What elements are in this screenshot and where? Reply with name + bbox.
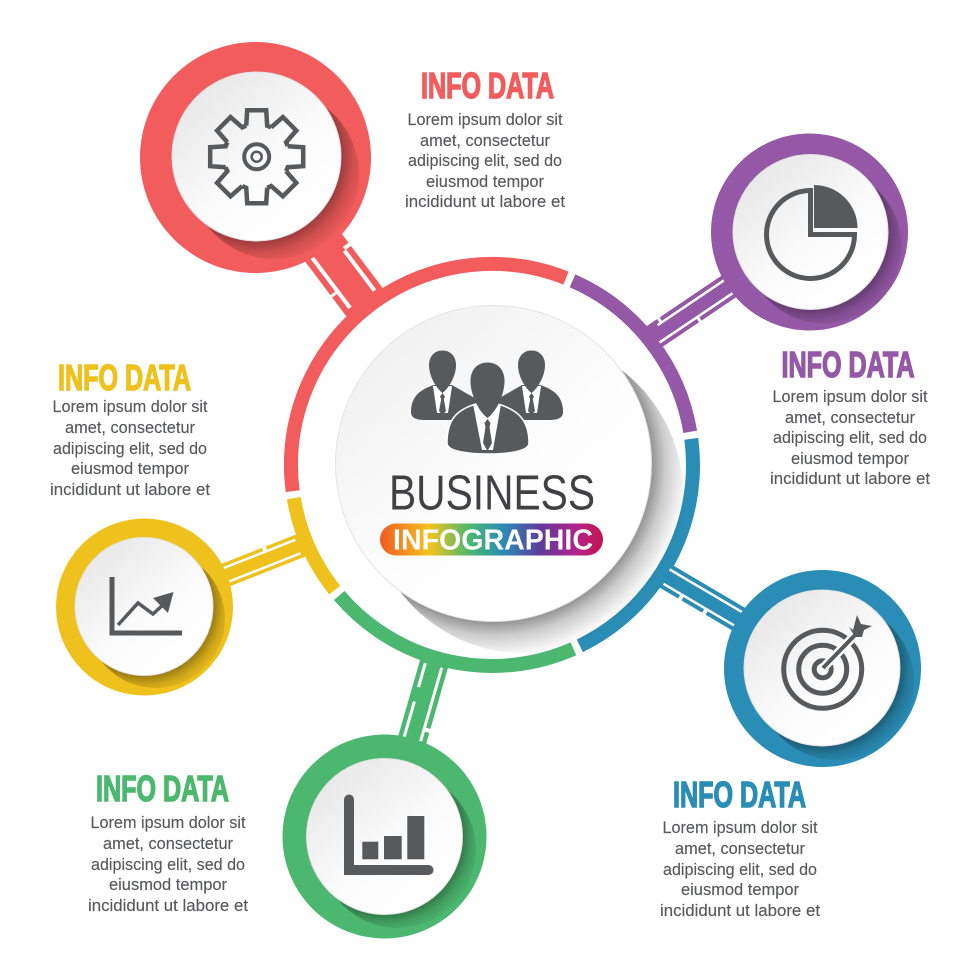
text block: blue: adipiscing elit, sed do (663, 861, 817, 879)
text block: red: INFO DATA (421, 65, 554, 106)
left person (411, 350, 478, 420)
text block: blue (660, 774, 820, 920)
node: red gear (140, 42, 371, 273)
text block: purple: eiusmod tempor (791, 450, 909, 468)
text block: purple (770, 344, 930, 488)
text block: green: Lorem ipsum dolor sit (90, 814, 246, 832)
ring segment: red (291, 264, 566, 491)
text block: purple: INFO DATA (782, 344, 914, 385)
text block: yellow: adipiscing elit, sed do (53, 440, 207, 458)
text block: yellow: incididunt ut labore et (50, 481, 210, 499)
text block: yellow: eiusmod tempor (71, 460, 189, 478)
text block: green: incididunt ut labore et (88, 897, 248, 915)
node: blue target (724, 570, 921, 767)
ring segment: yellow (294, 498, 335, 590)
text block: purple: incididunt ut labore et (770, 470, 930, 488)
connector: purple (642, 274, 737, 351)
text block: yellow: Lorem ipsum dolor sit (52, 398, 208, 416)
text block: green: INFO DATA (96, 768, 229, 809)
icon: rising line chart (112, 577, 182, 633)
central disc with shadow, people and title (336, 306, 684, 654)
text block: blue: incididunt ut labore et (660, 902, 820, 920)
icon: pie chart (767, 185, 858, 278)
badge: infographic: INFOGRAPHIC (393, 524, 593, 556)
node: purple pie chart (711, 134, 908, 330)
text block: green: eiusmod tempor (109, 876, 227, 894)
icon: bar chart (344, 795, 434, 875)
text block: purple: Lorem ipsum dolor sit (772, 388, 928, 406)
text block: purple: amet, consectetur (785, 409, 915, 427)
text block: red: amet, consectetur (420, 132, 550, 150)
text block: yellow: amet, consectetur (65, 419, 195, 437)
connector: green (398, 654, 450, 745)
heading: business: BUSINESS (389, 466, 595, 520)
text block: red: eiusmod tempor (426, 173, 544, 191)
text block: blue: Lorem ipsum dolor sit (662, 819, 818, 837)
text block: blue: eiusmod tempor (681, 881, 799, 899)
text block: green (88, 768, 248, 915)
text block: yellow (50, 357, 210, 499)
text block: green: amet, consectetur (103, 835, 233, 853)
right person (496, 350, 563, 420)
central disc shadow (368, 338, 684, 654)
text block: red (405, 65, 565, 211)
ring segment: blue (580, 439, 693, 646)
node: green bar chart (282, 734, 486, 938)
text block: blue: amet, consectetur (675, 840, 805, 858)
text block: red: Lorem ipsum dolor sit (408, 111, 563, 129)
centre person (447, 362, 529, 454)
text block: red: adipiscing elit, sed do (408, 152, 562, 170)
connector: red (304, 233, 388, 322)
ring segment: green (339, 596, 573, 666)
icon: gear (210, 110, 303, 203)
icon: target with arrow (784, 615, 872, 708)
ring segment: purple (572, 281, 690, 432)
central disc (336, 306, 652, 622)
text block: green: adipiscing elit, sed do (91, 856, 245, 874)
connector: yellow (220, 532, 311, 587)
text block: red: incididunt ut labore et (405, 193, 565, 211)
icon: business people (411, 350, 563, 454)
text block: blue: INFO DATA (673, 774, 806, 815)
text block: yellow: INFO DATA (58, 357, 191, 398)
node: yellow line chart (56, 518, 233, 696)
connector: blue (655, 563, 746, 631)
central segmented ring (291, 264, 693, 666)
text block: purple: adipiscing elit, sed do (773, 429, 927, 447)
